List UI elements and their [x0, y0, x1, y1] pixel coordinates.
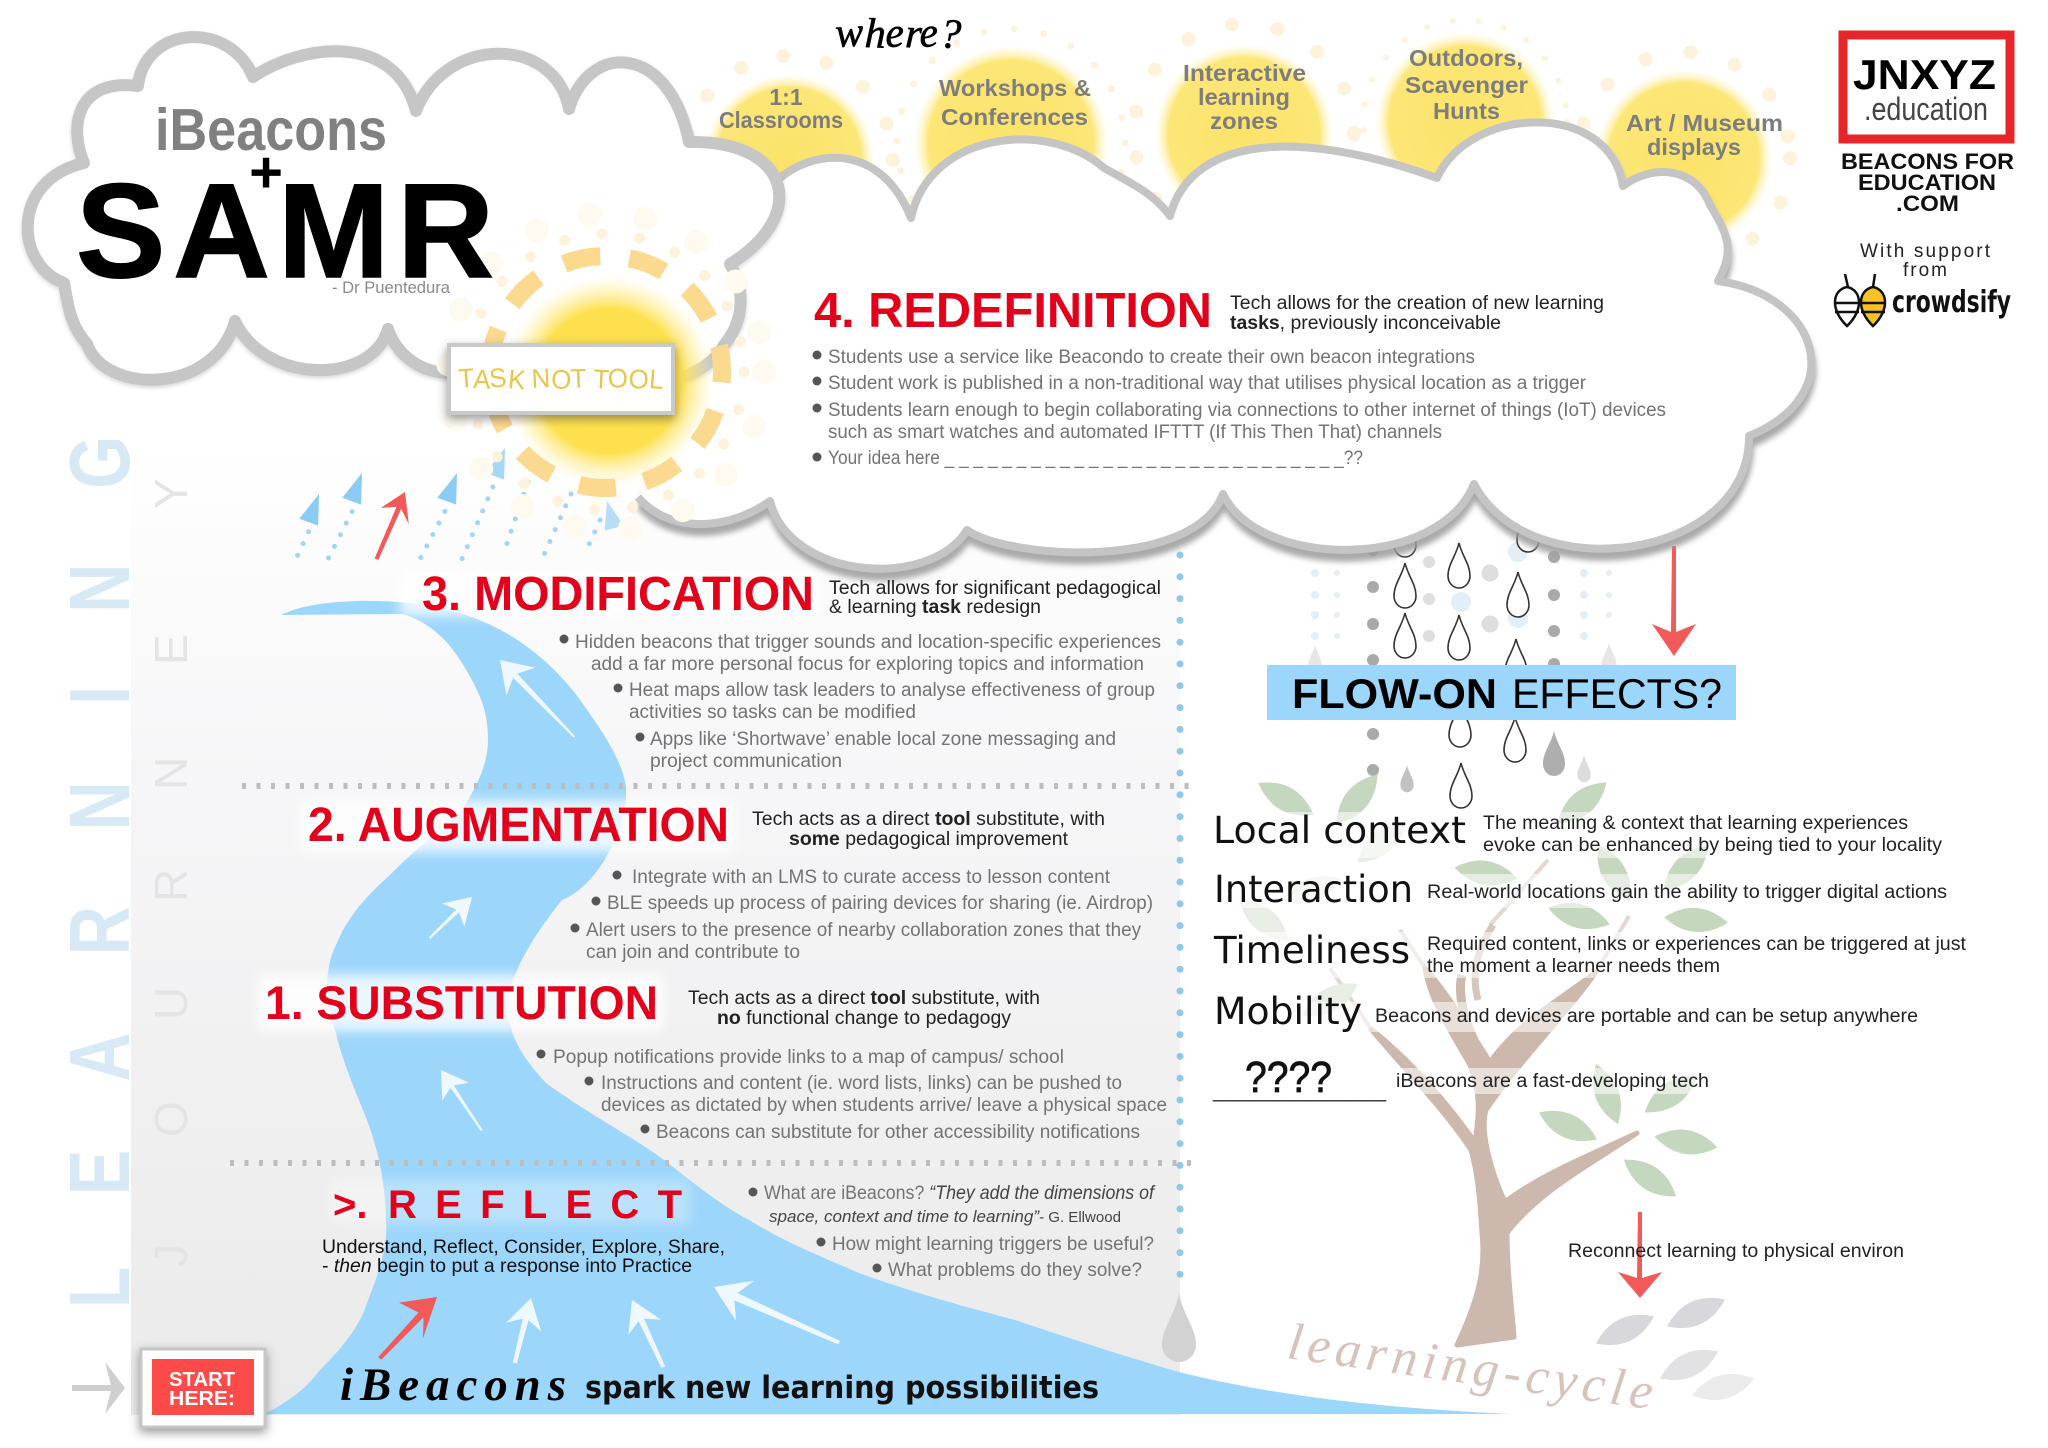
- callout: task not tool: [449, 345, 673, 413]
- location labels: Hunts: [1433, 98, 1500, 124]
- section 2: augmentation: can join and contribute to: [586, 942, 800, 963]
- section 2: augmentation: some pedagogical improvement: [789, 829, 1069, 850]
- location labels: 1:1: [769, 84, 803, 110]
- section 3: modification: Heat maps allow task leaders to analyse effectiveness of group: [629, 680, 1155, 701]
- section 3: modification: 3. MODIFICATION: [422, 568, 814, 621]
- section: reflect: - then begin to put a response into Practice: [322, 1256, 692, 1277]
- logo: JNXYZ education: .education: [1864, 91, 1988, 127]
- icon: sun: [448, 214, 764, 530]
- section 4: redefinition: Your idea here _ _ _ _ _ _ _ _ _ _ _ _ _ _ _ _ _ _ _ _ _ _ _ _ _ _ _ _??: [828, 448, 1363, 469]
- section: reflect: What problems do they solve?: [888, 1260, 1142, 1281]
- flow-on effects list: Real-world locations gain the ability to trigger digital actions: [1427, 882, 1947, 903]
- section 3: modification: add a far more personal focus for exploring topics and information: [591, 654, 1144, 675]
- section 4: redefinition: Student work is published in a non-traditional way that utilises physical location as a trigger: [828, 373, 1587, 394]
- cloud: title: [28, 37, 779, 394]
- note: reconnect learning: Reconnect learning to physical environ: [1568, 1241, 1904, 1262]
- section 3: modification: Tech allows for significant pedagogical: [829, 578, 1161, 599]
- section: reflect: [322, 1183, 1156, 1281]
- section: reflect: How might learning triggers be useful?: [832, 1234, 1154, 1255]
- section 1: substitution: 1. SUBSTITUTION: [265, 976, 658, 1029]
- location labels: zones: [1210, 108, 1278, 134]
- section 1: substitution: Tech acts as a direct tool substitute, with: [688, 988, 1040, 1009]
- section 4: redefinition: such as smart watches and automated IFTTT (If This Then That) channels: [828, 422, 1442, 443]
- location labels: learning: [1198, 84, 1290, 110]
- section 2: augmentation: Integrate with an LMS to curate access to lesson content: [632, 867, 1111, 888]
- section 1: substitution: no functional change to pedagogy: [717, 1008, 1012, 1029]
- title block: SAMR: [76, 157, 494, 306]
- section 1: substitution: Popup notifications provide links to a map of campus/ school: [553, 1047, 1064, 1068]
- location labels: Scavenger: [1405, 72, 1528, 98]
- arrow: red arrow from start toward reflect: [362, 1281, 450, 1371]
- section 1: substitution: Instructions and content (ie. word lists, links) can be pushed to: [601, 1073, 1122, 1094]
- section 3: modification: Hidden beacons that trigger sounds and location-specific experiences: [575, 632, 1161, 653]
- section: reflect: What are iBeacons? “They add the dimensions of: [764, 1183, 1156, 1204]
- banner: flow-on effects: FLOW-ON: [1292, 670, 1497, 717]
- section 3: modification: project communication: [650, 751, 842, 772]
- flow-on effects list: [1212, 809, 1967, 1102]
- location spots: yellow glows behind the cloud: [685, 20, 1790, 264]
- section: reflect: >.: [333, 1183, 367, 1227]
- flow-on effects list: ____________: [1212, 1077, 1387, 1102]
- location labels: Art / Museum: [1626, 110, 1783, 136]
- flow-on effects list: iBeacons are a fast-developing tech: [1396, 1071, 1709, 1092]
- section: reflect: space, context and time to learning”- G. Ellwood: [769, 1207, 1121, 1226]
- arrow: red arrow to fallen leaves: [1618, 1212, 1662, 1298]
- flow-on effects list: Mobility: [1214, 990, 1362, 1033]
- arrow: red arrow from the cloud to flow-on effects: [1652, 546, 1696, 656]
- sponsor: crowdsify: With support: [1860, 241, 1991, 262]
- section 3: modification: [422, 568, 1161, 772]
- flow-on effects list: the moment a learner needs them: [1427, 956, 1720, 977]
- location labels: [719, 45, 1783, 160]
- callout: task not tool: TASK NOT TOOL: [457, 362, 665, 395]
- section: reflect: Understand, Reflect, Consider, Explore, Share,: [322, 1237, 725, 1258]
- button: start here: [141, 1349, 265, 1427]
- section 4: redefinition: [812, 284, 1666, 469]
- section: reflect: REFLECT: [388, 1183, 682, 1227]
- flow-on effects list: Interaction: [1214, 868, 1413, 911]
- section dividers: [230, 786, 1194, 1163]
- dotted blue upward arrows: [296, 445, 624, 559]
- section 2: augmentation: 2. AUGMENTATION: [308, 799, 729, 852]
- section 4: redefinition: Tech allows for the creation of new learning: [1230, 293, 1604, 314]
- icon: grey raindrop on divider: [1162, 1293, 1196, 1362]
- title block: +: [249, 140, 283, 205]
- flow-on effects list: Local context: [1213, 809, 1466, 852]
- section 2: augmentation: [308, 799, 1153, 963]
- location labels: displays: [1647, 134, 1741, 160]
- tagline: iBeacons spark new learning possibilities: [340, 1359, 1099, 1411]
- heading highlight bands over the river: [258, 570, 820, 1224]
- section 1: substitution: Beacons can substitute for other accessibility notifications: [656, 1122, 1140, 1143]
- location labels: Classrooms: [719, 107, 843, 133]
- button: start here: HERE:: [169, 1388, 235, 1410]
- tagline: iBeacons spark new learning possibilities: spark new learning possibilities: [585, 1370, 1099, 1406]
- flow-on effects list: ????: [1245, 1053, 1332, 1102]
- flow-on effects list: evoke can be enhanced by being tied to your locality: [1483, 835, 1943, 856]
- handwritten label: where?: where?: [834, 10, 962, 58]
- icon: fallen leaves: [1591, 1289, 1757, 1407]
- location labels: Conferences: [941, 104, 1088, 130]
- banner: flow-on effects: [1267, 665, 1736, 720]
- vertical blue dotted divider: [1176, 555, 1184, 1285]
- handwritten label: learning-cycle: learning-cycle: [1284, 1313, 1657, 1421]
- section 2: augmentation: Tech acts as a direct tool substitute, with: [752, 809, 1105, 830]
- flow-on effects list: Timeliness: [1213, 929, 1410, 972]
- illustration: learning tree: [1205, 767, 1975, 1345]
- location labels: Interactive: [1183, 60, 1306, 86]
- tagline: iBeacons spark new learning possibilities: iBeacons: [340, 1359, 566, 1411]
- white hand-drawn arrows in the river: [418, 646, 848, 1375]
- logo: JNXYZ education: [1841, 35, 2014, 216]
- title block: - Dr Puentedura: [332, 278, 451, 297]
- vertical title: LEARNING: LEARNING: [53, 436, 148, 1308]
- section 1: substitution: devices as dictated by when students arrive/ leave a physical space: [601, 1095, 1167, 1116]
- section 2: augmentation: Alert users to the presence of nearby collaboration zones that they: [586, 920, 1141, 941]
- flow-on effects list: Required content, links or experiences can be triggered at just: [1427, 934, 1967, 955]
- section 4: redefinition: 4. REDEFINITION: [814, 284, 1212, 338]
- rain: dots and drops falling from the cloud: [1308, 507, 1617, 808]
- logo: JNXYZ education: BEACONS FOR: [1841, 149, 2014, 174]
- panel: learning journey background: [131, 440, 1180, 1415]
- section 1: substitution: [265, 976, 1167, 1143]
- section 3: modification: activities so tasks can be modified: [629, 702, 916, 723]
- logo: JNXYZ education: .COM: [1896, 191, 1959, 216]
- location labels: Outdoors,: [1409, 45, 1523, 71]
- sponsor: crowdsify: from: [1903, 260, 1947, 281]
- sponsor: crowdsify: [1834, 241, 2011, 326]
- flow-on effects list: Beacons and devices are portable and can be setup anywhere: [1375, 1006, 1918, 1027]
- banner: flow-on effects: EFFECTS?: [1512, 670, 1722, 717]
- location labels: Workshops &: [939, 75, 1091, 101]
- section 4: redefinition: Students use a service like Beacondo to create their own beacon integrations: [828, 347, 1475, 368]
- section 2: augmentation: BLE speeds up process of pairing devices for sharing (ie. Airdrop): [607, 893, 1153, 914]
- section 4: redefinition: Students learn enough to begin collaborating via connections to other internet of things (IoT) devices: [828, 400, 1666, 421]
- cloud: redefinition: [638, 122, 1811, 569]
- vertical title: JOURNEY: JOURNEY: [145, 478, 197, 1267]
- section 3: modification: Apps like ‘Shortwave’ enable local zone messaging and: [650, 729, 1116, 750]
- section 4: redefinition: tasks, previously inconceivable: [1230, 313, 1501, 334]
- arrow: red upward arrow toward the sun: [362, 486, 420, 565]
- title block: iBeacons: [155, 97, 387, 163]
- logo: JNXYZ education: EDUCATION: [1858, 170, 1996, 195]
- flow-on effects list: The meaning & context that learning experiences: [1483, 813, 1908, 834]
- section 3: modification: & learning task redesign: [829, 597, 1041, 618]
- logo: JNXYZ education: JNXYZ: [1853, 51, 1996, 98]
- river of learning: [265, 601, 1510, 1414]
- button: start here: START: [169, 1369, 235, 1391]
- arrow: grey arrow into start: [72, 1362, 125, 1414]
